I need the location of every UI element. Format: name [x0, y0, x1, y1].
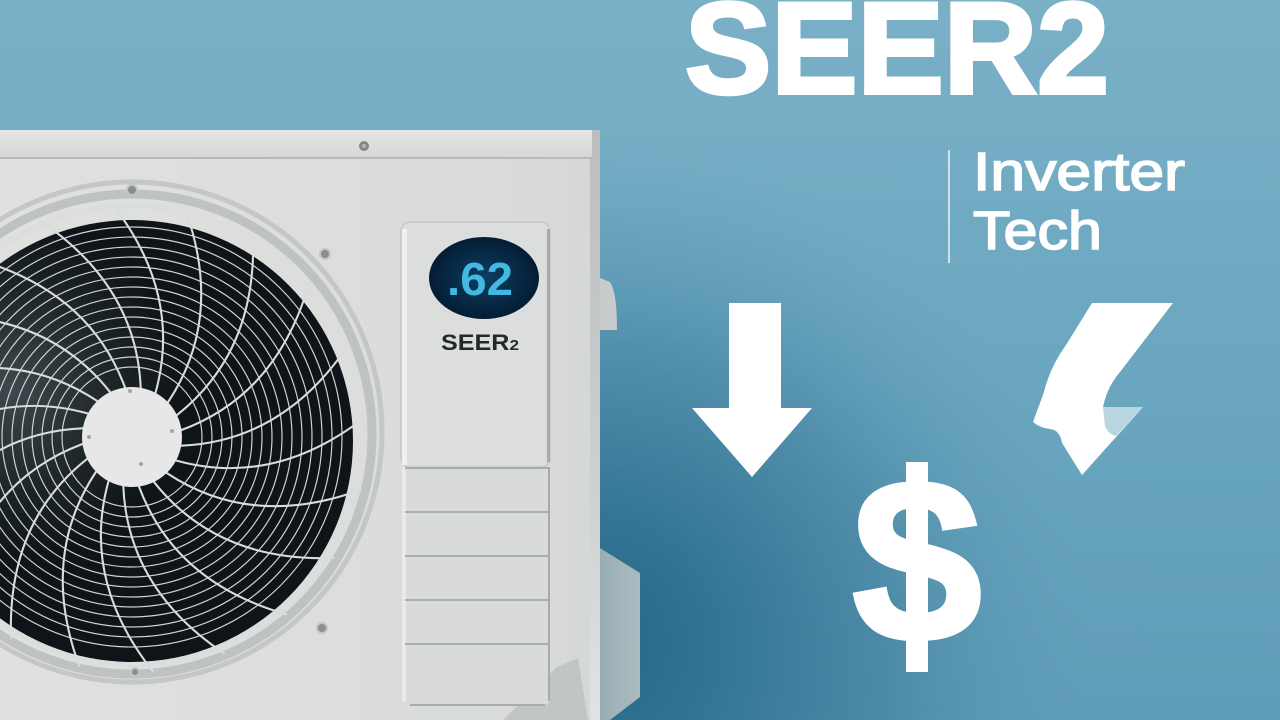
control panel: [401, 222, 550, 467]
display: .62: [447, 253, 513, 305]
unit body: [0, 156, 600, 720]
text block: Inverter Tech: Inverter: [973, 142, 1185, 202]
top lid: [0, 130, 592, 159]
icon: dollar sign: $: [852, 432, 982, 691]
fan guard: [0, 182, 382, 682]
radial spokes: [0, 203, 366, 671]
outer rings: [0, 182, 382, 682]
fan hub: [82, 387, 182, 487]
icon: lightning bolt: [1033, 303, 1173, 475]
louver slats: [402, 467, 550, 706]
lower corner panel: [503, 658, 588, 720]
side bracket: [600, 278, 640, 720]
side edge: [590, 130, 600, 720]
concentric grille wires: [0, 227, 342, 647]
icon: down arrow: [692, 303, 812, 477]
mounting screws: [127, 185, 330, 676]
display label: SEER 2: [441, 330, 519, 355]
display: [429, 237, 539, 319]
text block: Inverter Tech: [948, 142, 1185, 263]
fan dark interior: [0, 220, 353, 662]
text block: Inverter Tech: Tech: [973, 201, 1102, 261]
outdoor AC unit: [0, 130, 640, 720]
